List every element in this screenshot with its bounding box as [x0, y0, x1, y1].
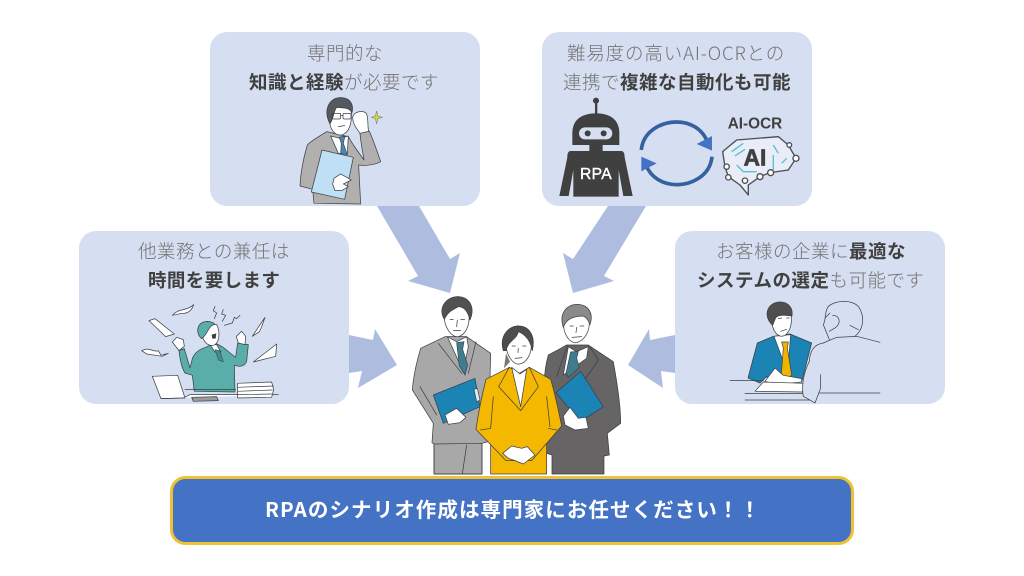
- text: system selection possible: システムの選定も可能です: [697, 267, 924, 293]
- arrow: left panel to team: [349, 329, 397, 388]
- heading: optimal for customers: お客様の企業に最適な: [716, 238, 906, 264]
- text: complex automation: 連携で複雑な自動化も可能: [563, 69, 791, 95]
- icon: RPA robot: RPA: [580, 166, 612, 183]
- panel: concurrent duties: [79, 231, 349, 404]
- icon: overwhelmed worker at desk: [142, 305, 278, 401]
- icon: AI-OCR brain: AI-OCR: [728, 116, 782, 133]
- arrow: top-right panel to team: [563, 206, 646, 293]
- illustration: team of three consultants: [412, 297, 621, 474]
- figure: centre woman in yellow suit: [476, 326, 562, 474]
- heading: concurrent duties: 他業務との兼任は: [138, 238, 290, 264]
- text: knowledge and experience required: 知識と経験が必要です: [249, 69, 439, 95]
- panel: system selection: [675, 231, 945, 404]
- text: leave it to specialists: RPAのシナリオ作成は専門家にお任せください！！: [265, 493, 761, 523]
- icon: businessman adjusting glasses: [300, 98, 383, 204]
- icon: consultant meeting client: [730, 301, 880, 403]
- icon: AI-OCR brain: AI: [744, 144, 766, 170]
- text: takes time: 時間を要します: [148, 267, 280, 293]
- panel: AI-OCR integration: [542, 32, 812, 206]
- figure: left man in gray suit: [412, 297, 491, 474]
- icon: AI-OCR brain: [723, 116, 799, 195]
- heading: specialist knowledge: 専門的な: [307, 40, 383, 66]
- arrow: right panel to team: [628, 329, 675, 388]
- figure: right man in dark suit: [544, 304, 621, 474]
- heading: AI-OCR integration: 難易度の高いAI-OCRとの: [567, 40, 785, 66]
- panel: specialist knowledge: [210, 32, 480, 206]
- icon: circular sync arrows: [641, 122, 712, 185]
- icon: RPA robot: [559, 98, 633, 197]
- arrow: top-left panel to team: [377, 206, 460, 293]
- banner: call to action: [172, 478, 852, 544]
